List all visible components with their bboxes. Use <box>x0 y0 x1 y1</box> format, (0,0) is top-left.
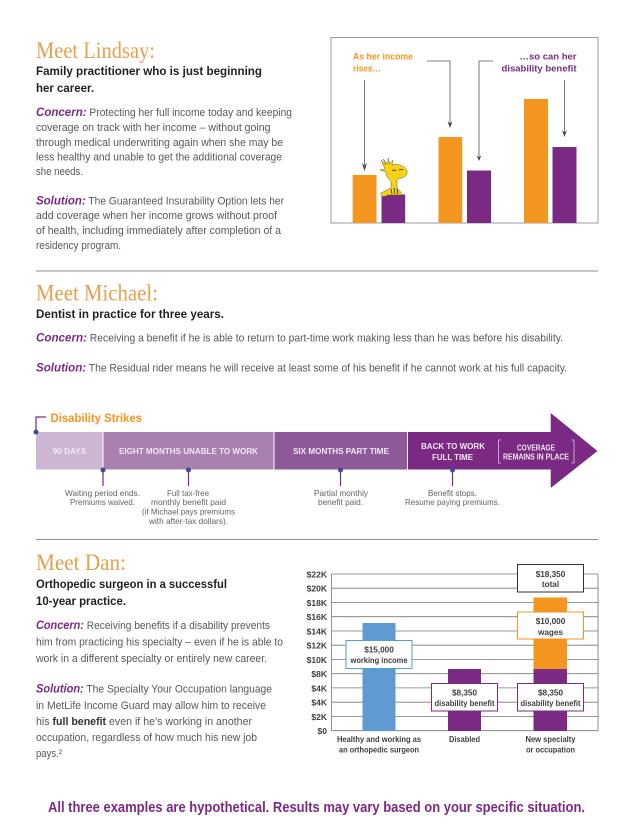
x axis labels <box>337 735 576 754</box>
y axis labels: $0 <box>318 726 327 736</box>
callout: full benefit <box>142 488 235 526</box>
subheading: Dan role: 10-year practice. <box>36 594 126 608</box>
callout: waiting period: Premiums waived. <box>70 497 135 507</box>
x axis labels: an orthopedic surgeon <box>339 746 419 754</box>
text block: Dan solution: in MetLife Income Guard may allow him to receive <box>36 700 266 712</box>
label: so can her disability benefit <box>502 52 577 74</box>
callout: wages: wages <box>537 628 563 637</box>
bar: disabled <box>448 669 481 731</box>
x axis labels: New specialty <box>526 735 576 744</box>
text block: Lindsay concern: less healthy and unable to get the additional coverage <box>36 152 282 164</box>
text block: Lindsay solution: of health, including immediately after completion of a <box>36 225 281 237</box>
x axis labels: Healthy and working as <box>337 735 421 744</box>
panel: Dan text <box>35 550 283 760</box>
callout: partial benefit: benefit paid. <box>318 497 363 507</box>
callout: partial benefit: Partial monthly <box>314 488 369 498</box>
text block: Lindsay solution: residency program. <box>36 240 121 252</box>
text block: Lindsay concern: she needs. <box>36 166 83 178</box>
y axis labels: $2K <box>311 712 328 722</box>
callout: disability benefit: $8,350 <box>452 688 477 698</box>
text block: Dan solution <box>36 682 272 760</box>
callout: total: total <box>542 580 559 589</box>
callout: disability benefit second: disability benefit <box>520 699 581 708</box>
text block: Lindsay concern <box>36 105 292 178</box>
callout: full benefit: Full tax-free <box>167 488 209 498</box>
text block: Lindsay concern: Concern: Protecting her full income today and keeping <box>36 105 292 119</box>
x axis labels: or occupation <box>526 746 575 754</box>
callout: wages <box>518 612 584 639</box>
callout: disability benefit second <box>518 684 584 711</box>
callout: waiting period: Waiting period ends. <box>65 488 140 498</box>
arrow: back to work and coverage: REMAINS IN PLACE <box>503 452 570 462</box>
heading: Meet Lindsay: Meet Lindsay: <box>36 38 155 63</box>
label: as her income rises: As her income <box>353 52 413 62</box>
panel: Lindsay text <box>36 38 292 252</box>
segment: 90 days <box>36 432 102 470</box>
callout: disability benefit <box>432 684 498 711</box>
label: disability strikes: Disability Strikes <box>50 411 142 425</box>
text block: Lindsay concern: through medical underwriting again when she may be <box>36 137 283 149</box>
y axis labels <box>307 570 328 736</box>
timeline <box>34 411 598 526</box>
callout: partial benefit <box>314 488 369 507</box>
segment: 90 days: 90 DAYS <box>53 447 87 456</box>
text block: Lindsay solution: add coverage when her income grows without proof <box>36 210 277 222</box>
subheading: Lindsay role: Family practitioner who is just beginning <box>36 64 262 78</box>
text block: Lindsay solution <box>36 194 284 252</box>
segment: eight months <box>104 432 274 470</box>
bar chart: income scenarios <box>307 564 598 754</box>
subheading: Michael role: Dentist in practice for three years. <box>36 307 224 321</box>
heading: Meet Dan: Meet Dan: <box>36 550 126 575</box>
callout: wages: $10,000 <box>536 617 566 626</box>
callout: waiting period <box>65 488 140 507</box>
bars: disability benefit <box>382 147 576 223</box>
callout: full benefit: monthly benefit paid <box>151 497 226 507</box>
text block: Dan solution: occupation, regardless of how much his new job <box>36 732 257 744</box>
y axis labels: $14K <box>307 626 328 636</box>
callout: benefit stops: Benefit stops. <box>428 488 477 498</box>
bars: income <box>353 99 548 223</box>
label: as her income rises <box>353 52 413 74</box>
subheading: Dan role <box>36 577 227 608</box>
heading: Meet Michael: Meet Michael: <box>36 280 158 306</box>
label: disability strikes <box>36 411 142 432</box>
callout: working income: $15,000 <box>364 646 394 654</box>
text block: Dan solution: Solution: The Specialty Your Occupation language <box>36 682 272 696</box>
arrow: back to work and coverage: FULL TIME <box>432 453 474 462</box>
label: so can her disability benefit: …so can her <box>519 52 577 62</box>
y axis labels: $10K <box>307 655 328 665</box>
text block: Dan solution: pays.² <box>36 748 62 760</box>
bar: new specialty stacked <box>534 598 567 731</box>
icon: yellow bird <box>380 158 407 196</box>
text block: Dan concern <box>35 618 283 665</box>
text block: Dan solution: his full benefit even if he’s working in another <box>36 716 252 728</box>
y axis labels: $4K <box>311 683 328 693</box>
panel: Michael text <box>36 280 567 374</box>
callout: full benefit: (if Michael pays premiums <box>142 506 235 516</box>
subheading: Dan role: Orthopedic surgeon in a successful <box>36 577 227 591</box>
arrow: back to work and coverage: COVERAGE <box>517 444 556 452</box>
y axis labels: $22K <box>307 570 328 580</box>
text block: Michael solution: Solution: The Residual rider means he will receive at least some of his benefit if he cannot work at his full capacity. <box>36 360 567 374</box>
callout: full benefit: with after-tax dollars). <box>148 516 228 526</box>
y axis labels: $12K <box>307 641 328 651</box>
y axis labels: $20K <box>307 584 328 594</box>
callout: benefit stops <box>405 488 500 507</box>
segment: eight months: EIGHT MONTHS UNABLE TO WORK <box>119 447 258 456</box>
arrow: back to work and coverage <box>408 413 598 488</box>
callout: disability benefit second: $8,350 <box>538 688 563 698</box>
text block: Dan concern: work in a different specialty or entirely new career. <box>35 653 267 665</box>
markers <box>34 430 455 486</box>
text block: Lindsay solution: Solution: The Guaranteed Insurability Option lets her <box>36 194 284 208</box>
text block: Dan concern: Concern: Receiving benefits if a disability prevents <box>36 618 270 632</box>
subheading: Lindsay role: her career. <box>36 81 94 95</box>
segment: six months: SIX MONTHS PART TIME <box>293 447 390 456</box>
arrows <box>362 61 567 171</box>
y axis labels: $16K <box>307 612 328 622</box>
x axis labels: Disabled <box>449 735 480 744</box>
label: so can her disability benefit: disability benefit <box>502 64 577 74</box>
divider <box>36 270 598 272</box>
callout: total <box>518 564 584 592</box>
callout: total: $18,350 <box>536 570 566 579</box>
subheading: Lindsay role <box>36 64 262 95</box>
segment: six months <box>274 432 407 470</box>
bar: healthy and working <box>362 623 396 731</box>
text block: Michael concern: Concern: Receiving a benefit if he is able to return to part-time work making less than he was before his disability. <box>36 330 563 344</box>
callout: working income <box>346 640 412 668</box>
callout: disability benefit: disability benefit <box>434 699 495 708</box>
y axis labels: $4K <box>311 698 328 708</box>
label: as her income rises: rises… <box>353 64 381 74</box>
y axis labels: $8K <box>311 669 328 679</box>
arrow: back to work and coverage: BACK TO WORK <box>421 442 485 451</box>
panel: income and benefit bar chart <box>331 38 598 223</box>
grid <box>332 574 598 731</box>
y axis labels: $18K <box>307 598 328 608</box>
callout: benefit stops: Resume paying premiums. <box>405 497 500 507</box>
text block: Lindsay concern: coverage on track with her income – without going <box>36 122 271 134</box>
divider <box>36 539 598 540</box>
callout: working income: working income <box>350 656 408 665</box>
text block: Dan concern: him from practicing his specialty – even if he is able to <box>36 636 283 648</box>
